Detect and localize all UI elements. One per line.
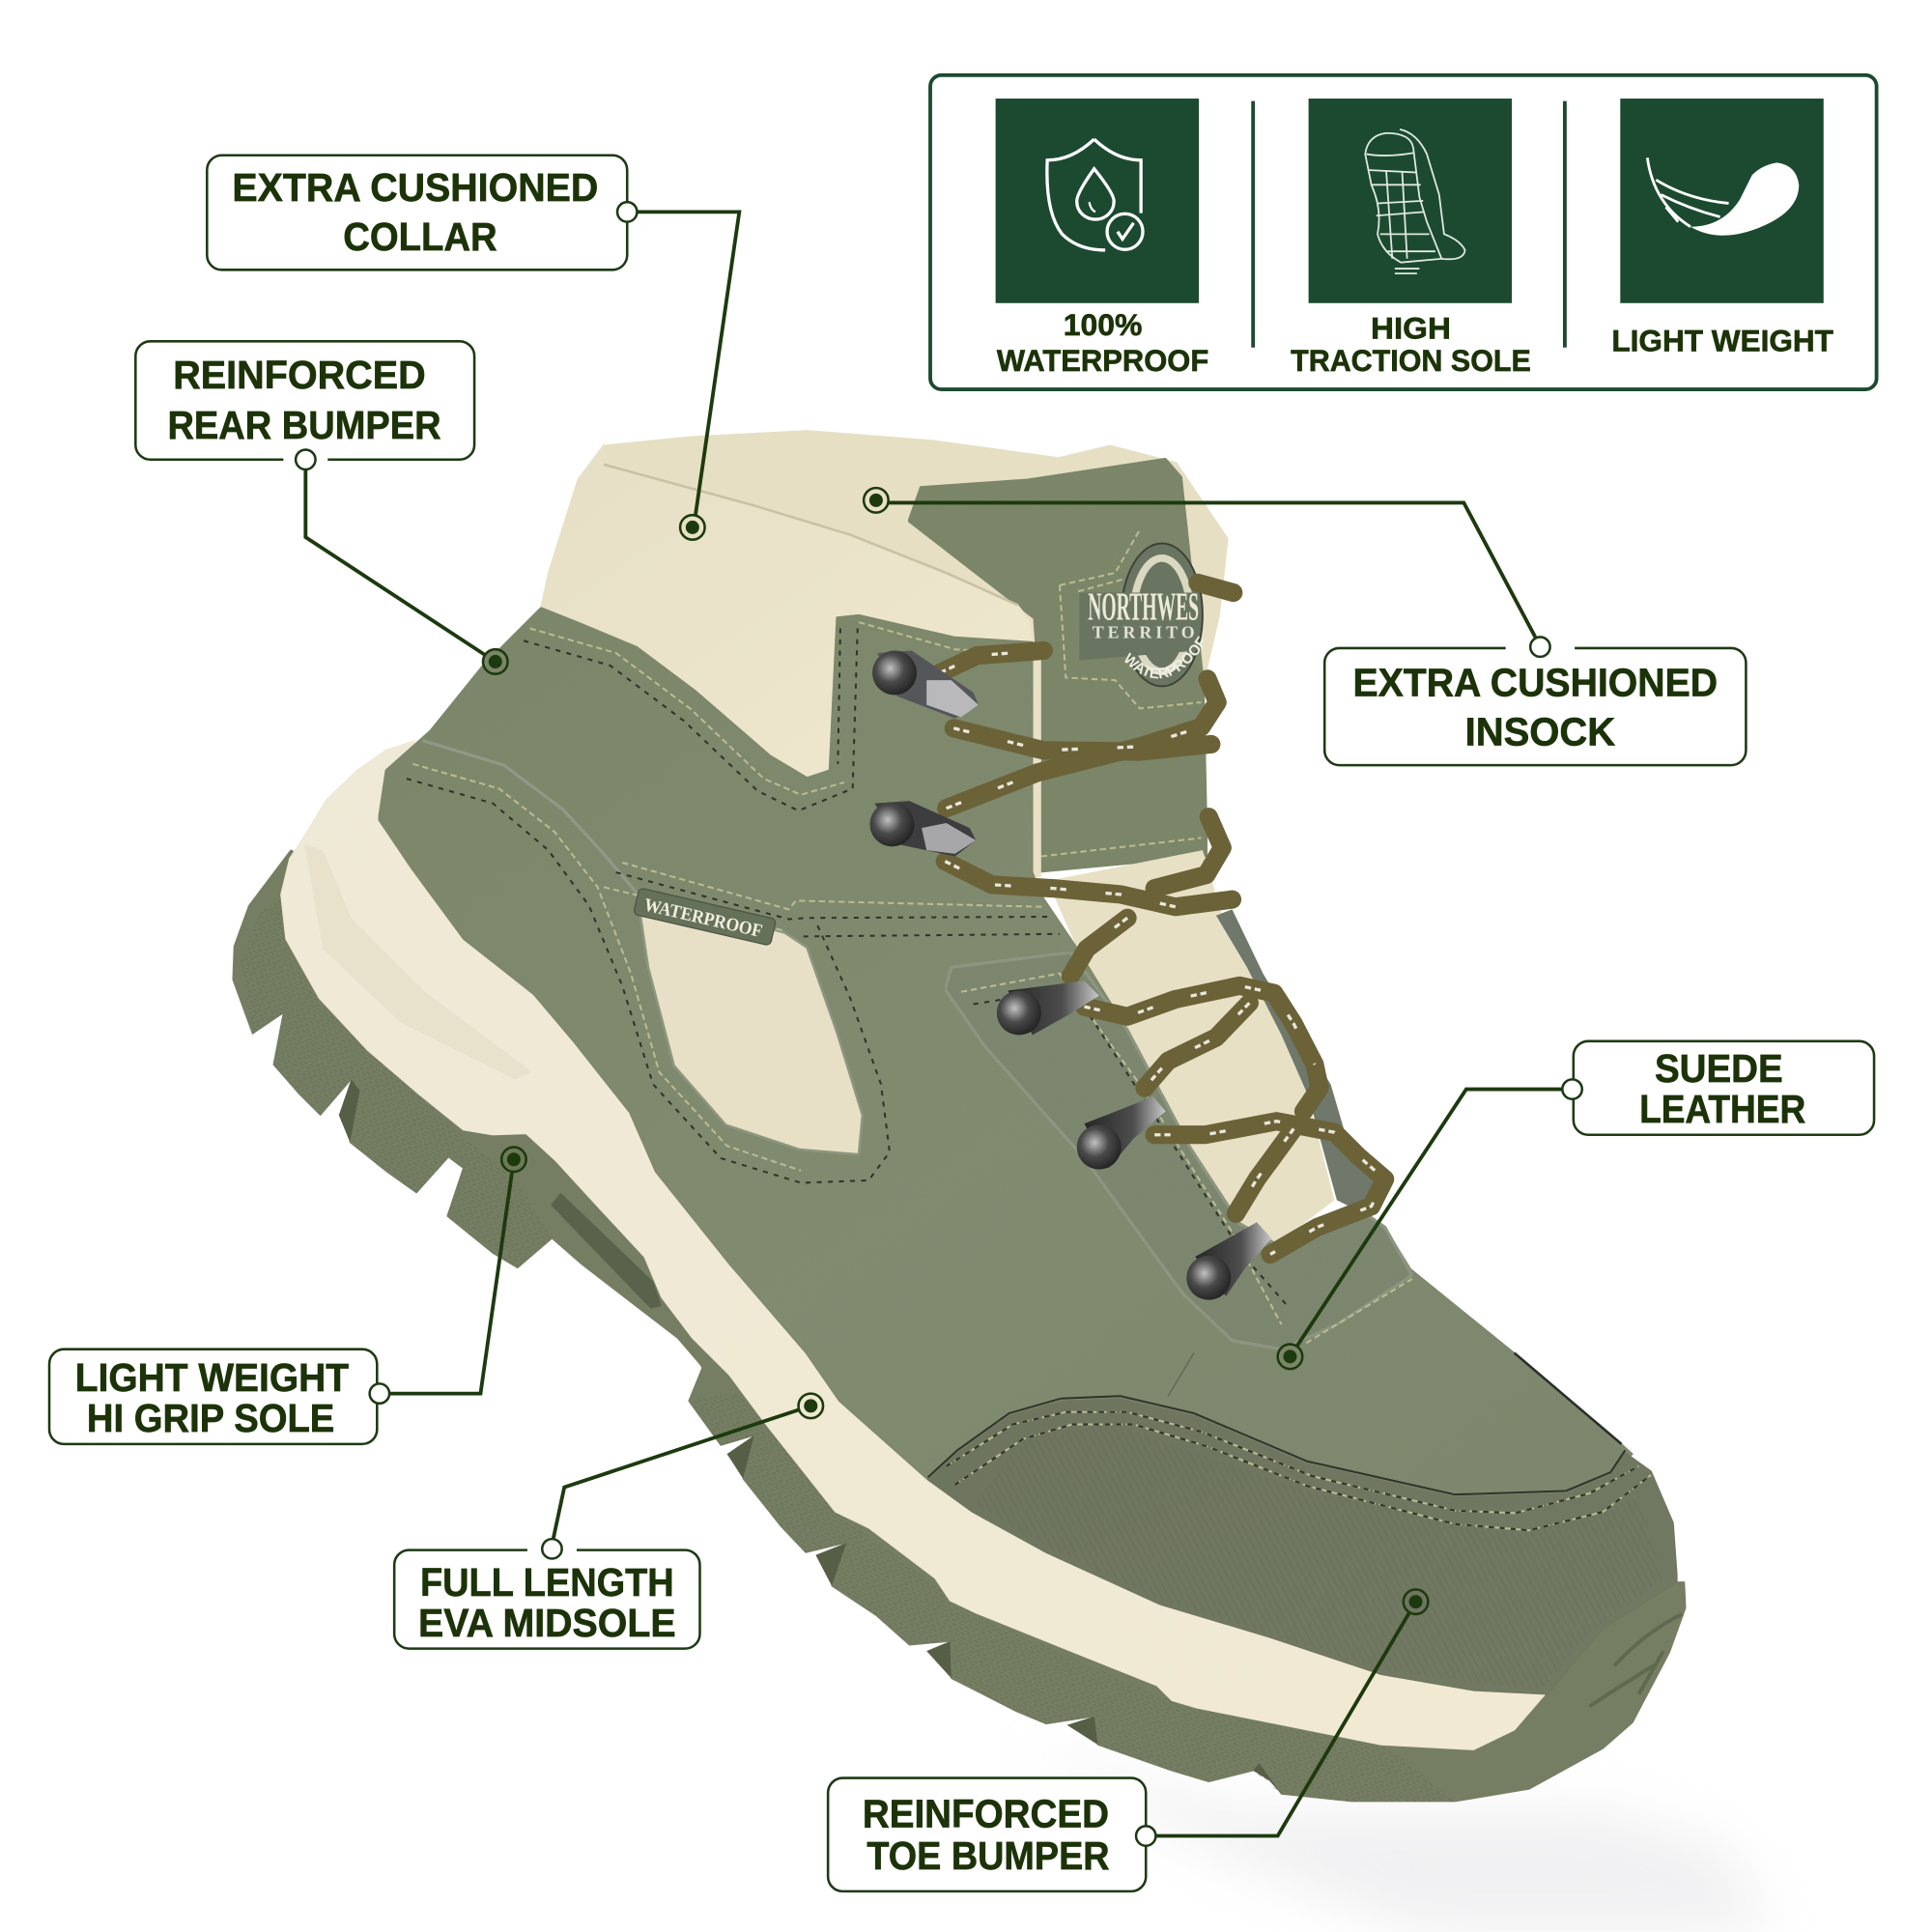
icon: shield with drop and check	[1047, 139, 1143, 250]
callout: full length eva midsole: EVA MIDSOLE	[418, 1601, 676, 1645]
midsole	[281, 741, 1545, 1749]
side mesh panel	[637, 894, 863, 1154]
arch shank detail	[551, 1193, 662, 1309]
callout: reinforced rear bumper	[135, 341, 508, 674]
callout: extra cushioned collar	[207, 156, 739, 540]
toe cap texture	[974, 1423, 1663, 1690]
bumper grooves	[1589, 1614, 1682, 1707]
icon: sole tread	[1365, 129, 1465, 273]
callout: full length eva midsole: FULL LENGTH	[420, 1560, 674, 1605]
midsole ribbing	[304, 844, 532, 1079]
callout: suede leather: SUEDE	[1655, 1046, 1783, 1091]
label: 100% waterproof: WATERPROOF	[997, 343, 1208, 378]
brand badge: NORTHWES	[1088, 585, 1199, 629]
callout: light weight hi grip sole: HI GRIP SOLE	[87, 1396, 334, 1440]
boot illustration	[232, 430, 1687, 1803]
label: 100% waterproof: 100%	[1064, 307, 1142, 342]
panel: key features	[930, 75, 1877, 389]
label: 100% waterproof	[997, 307, 1208, 378]
tongue	[908, 458, 1208, 872]
toe cap stitching	[947, 1412, 1651, 1530]
brand badge	[1059, 531, 1204, 709]
vamp outline	[1515, 1353, 1622, 1444]
callout: extra cushioned collar: COLLAR	[343, 214, 497, 259]
waterproof tag: WATERPROOF	[642, 895, 764, 942]
tread texture	[241, 899, 1455, 1802]
toe seam	[927, 1396, 1625, 1494]
label: light weight: LIGHT WEIGHT	[1611, 324, 1833, 358]
callout: reinforced toe bumper	[828, 1589, 1428, 1891]
throat mesh	[1047, 850, 1334, 1244]
icon: feather	[1647, 157, 1799, 236]
tile: traction sole	[1291, 99, 1531, 378]
outsole with tread	[233, 850, 1686, 1802]
gusset	[1216, 909, 1385, 1216]
brand badge: TERRITO	[1093, 623, 1195, 642]
suede stitching	[407, 579, 1412, 1396]
ground shadow	[1010, 1737, 1775, 1932]
callout: light weight hi grip sole	[49, 1148, 526, 1444]
callout: extra cushioned insock: EXTRA CUSHIONED	[1353, 661, 1718, 705]
callout: extra cushioned insock: INSOCK	[1465, 710, 1616, 754]
suede upper	[379, 608, 1633, 1497]
collar front	[541, 444, 1033, 778]
callout: suede leather: LEATHER	[1639, 1087, 1805, 1131]
callout: light weight hi grip sole: LIGHT WEIGHT	[75, 1355, 349, 1400]
lining inside collar	[604, 430, 1229, 690]
callout: reinforced toe bumper: TOE BUMPER	[867, 1833, 1110, 1878]
tile: waterproof	[996, 99, 1208, 378]
collar fold line	[604, 465, 1018, 605]
callout: full length eva midsole	[394, 1394, 823, 1649]
toe cap	[927, 1399, 1677, 1694]
callout: reinforced rear bumper: REINFORCED	[173, 353, 426, 397]
callout: reinforced rear bumper: REAR BUMPER	[167, 403, 441, 447]
label: high traction sole: TRACTION SOLE	[1291, 343, 1531, 378]
brand badge: WATERPROOF	[1124, 636, 1204, 678]
lace stay panel	[945, 952, 1412, 1350]
callout: extra cushioned collar: EXTRA CUSHIONED	[232, 165, 598, 210]
lining strip	[1030, 653, 1041, 877]
label: high traction sole: HIGH	[1371, 311, 1451, 346]
eyelets	[870, 650, 1271, 1300]
callout: reinforced toe bumper: REINFORCED	[863, 1792, 1109, 1836]
callout: extra cushioned insock	[864, 488, 1746, 765]
label: high traction sole	[1291, 311, 1531, 378]
divider	[1253, 101, 1565, 348]
lug shadows	[339, 1079, 1282, 1794]
laces	[940, 582, 1385, 1254]
tile: light weight	[1611, 99, 1833, 358]
callout: suede leather	[1278, 1041, 1874, 1369]
